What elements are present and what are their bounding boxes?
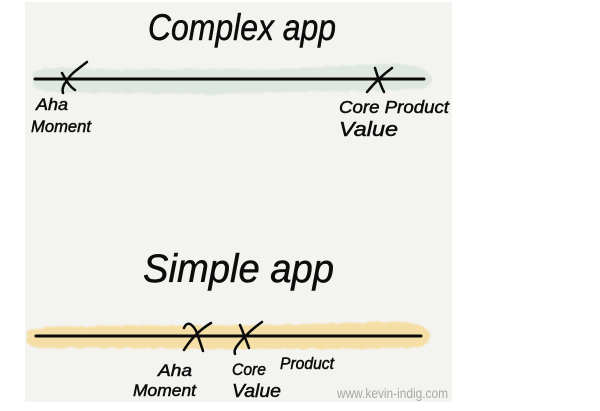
marker: Core Product Value cross: [235, 322, 262, 354]
label: Moment: Moment: [133, 382, 197, 400]
label: Core: Core: [232, 361, 266, 379]
panel: sketch background: [25, 2, 452, 402]
green highlight band: [33, 64, 432, 94]
timeline line: [36, 334, 421, 338]
marker: Core Product Value cross: [367, 68, 392, 92]
marker: Aha Moment cross: [184, 323, 211, 351]
timeline line: [35, 78, 424, 80]
heading: Simple app: Simple app: [143, 247, 334, 291]
yellow highlight band: [26, 322, 431, 349]
label: Aha: Aha: [157, 362, 192, 380]
panel: complex app timeline: [31, 62, 450, 141]
marker: Aha Moment cross: [62, 62, 87, 93]
label: Core Product: Core Product: [339, 97, 450, 117]
label: Product: Product: [280, 355, 335, 373]
label: Moment: Moment: [31, 118, 92, 136]
heading: Complex app: Complex app: [148, 7, 336, 48]
label: Value: Value: [339, 119, 398, 141]
panel: simple app timeline: [26, 322, 431, 401]
watermark: website: www.kevin-indig.com: [336, 386, 448, 401]
label: Value: Value: [232, 380, 281, 401]
label: Aha: Aha: [35, 96, 68, 114]
